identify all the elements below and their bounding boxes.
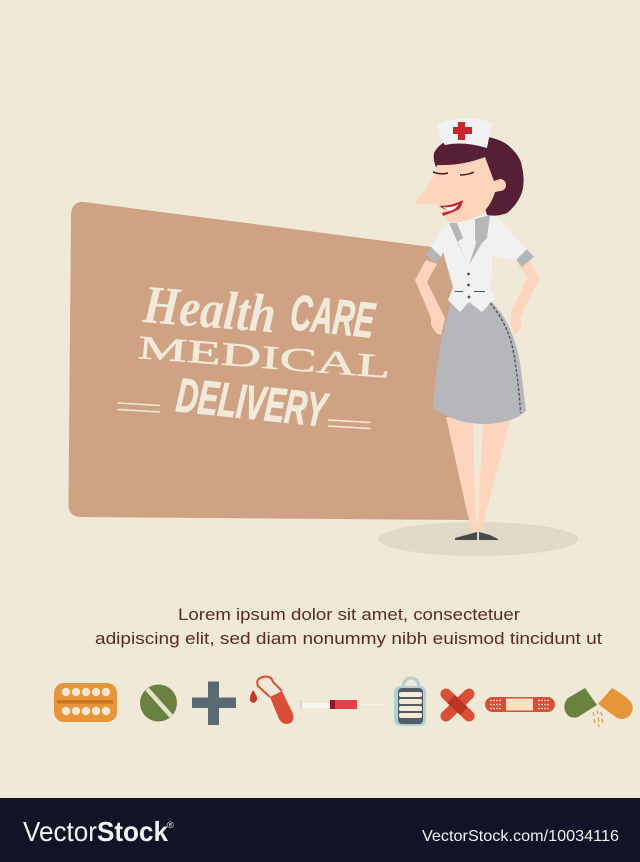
mouth	[439, 200, 463, 216]
decorative heading rules left	[118, 403, 160, 412]
nurse figure	[415, 118, 540, 540]
icon: blister pack	[54, 683, 117, 722]
icon: plus	[192, 682, 236, 725]
cap red cross	[453, 122, 472, 140]
icon: syringe	[300, 700, 383, 709]
right arm	[511, 258, 540, 335]
jacket buttons and pockets	[455, 273, 485, 298]
heading word: Health: Health	[140, 273, 278, 345]
shoes	[455, 532, 498, 540]
hair	[434, 137, 524, 216]
left arm	[415, 260, 445, 335]
eyes	[433, 172, 474, 175]
icon: clipboard	[394, 678, 426, 726]
face	[415, 157, 506, 222]
heading word: MEDICAL: MEDICAL	[136, 330, 392, 386]
icon: test tube	[250, 677, 293, 724]
footer registered mark: ®	[167, 820, 174, 830]
skirt	[433, 300, 526, 424]
heading: Health Care Medical Delivery	[118, 273, 392, 438]
legs	[446, 417, 477, 532]
icon row	[54, 677, 633, 727]
skirt seam	[490, 303, 520, 413]
decorative heading rules right	[328, 420, 370, 428]
icon: crossed plasters	[446, 694, 469, 716]
jacket	[431, 215, 527, 312]
footer bar	[0, 798, 640, 862]
icon: bandage	[485, 697, 555, 712]
sleeve cuffs	[426, 247, 534, 267]
text block: lorem ipsum: adipiscing elit, sed diam nonummy nibh euismod tincidunt ut	[95, 629, 602, 648]
nurse cap	[437, 118, 492, 148]
footer id text: VectorStock.com/10034116	[422, 828, 619, 845]
heading word: DELIVERY: DELIVERY	[174, 368, 331, 438]
text block: lorem ipsum	[95, 605, 602, 648]
icon: open capsule	[564, 688, 633, 727]
heading word: CARE: CARE	[288, 284, 378, 349]
panel: brown banner	[68, 202, 470, 520]
lapels	[449, 215, 490, 265]
icon: round pill	[140, 684, 177, 722]
shadow under nurse	[378, 522, 578, 556]
footer logo: VectorStock: VectorStock	[23, 816, 168, 847]
text block: lorem ipsum: Lorem ipsum dolor sit amet, consectetuer	[178, 605, 520, 624]
